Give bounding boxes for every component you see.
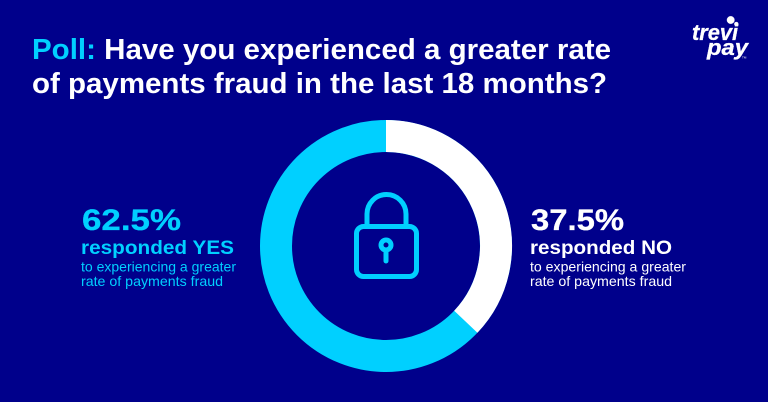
callout: NO: to experiencing a greater bbox=[530, 258, 686, 274]
segment: YES 62.5% bbox=[276, 136, 496, 356]
title: Poll: Have you experienced a greater rate bbox=[32, 34, 611, 66]
title: of payments fraud in the last 18 months? bbox=[32, 68, 607, 100]
callout: YES: 62.5% bbox=[82, 204, 181, 237]
title bbox=[32, 34, 611, 100]
logo: TreviPay: pay bbox=[706, 35, 750, 60]
donut chart bbox=[276, 136, 496, 356]
segment: NO 37.5% bbox=[386, 136, 496, 322]
logo: TreviPay bbox=[692, 16, 750, 60]
callout: NO: 37.5% bbox=[531, 204, 624, 237]
logo: TreviPay: trevi bbox=[692, 20, 739, 45]
callout: NO: responded NO bbox=[530, 237, 672, 259]
icon: padlock bbox=[356, 195, 416, 276]
callout: NO: rate of payments fraud bbox=[530, 273, 672, 289]
callout: YES: responded YES bbox=[81, 237, 234, 259]
callout: YES: rate of payments fraud bbox=[81, 273, 223, 289]
callout: YES bbox=[81, 204, 236, 289]
callout: YES: to experiencing a greater bbox=[81, 258, 236, 274]
callout: NO bbox=[530, 204, 686, 289]
logo: TreviPay: TM bbox=[742, 56, 747, 60]
